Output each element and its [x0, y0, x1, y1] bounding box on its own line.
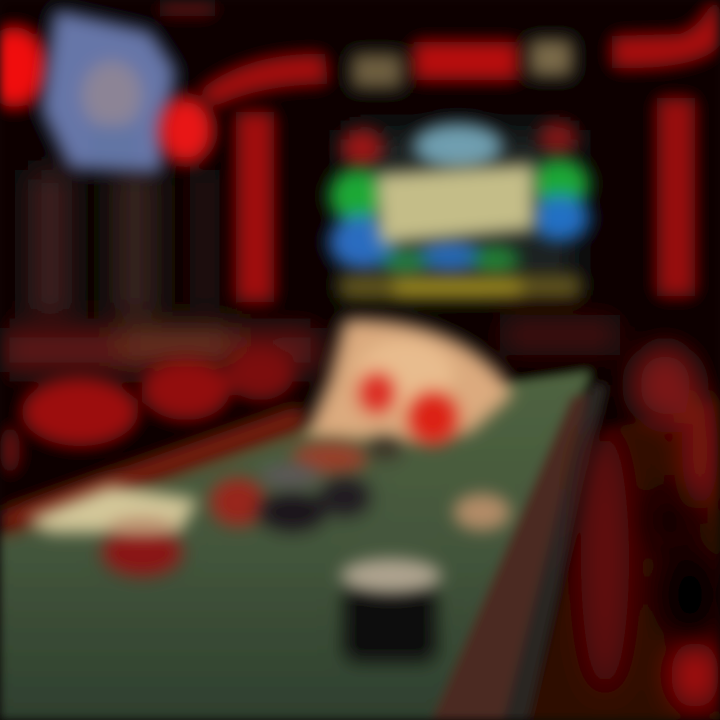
red chips — [210, 442, 368, 526]
stack top — [341, 559, 441, 593]
screen top light blue — [414, 124, 502, 168]
central screen — [330, 122, 588, 298]
blue grey poster — [42, 10, 175, 172]
central chip stacks — [210, 436, 403, 532]
red vertical pillar left — [236, 112, 274, 302]
far seat row — [0, 315, 620, 372]
front chip stack — [341, 559, 441, 661]
chip body — [102, 528, 182, 576]
dark chips — [258, 436, 403, 532]
top right red shape — [612, 0, 720, 68]
red card pips — [359, 373, 458, 444]
cream card on rail — [25, 486, 198, 532]
red seats — [0, 348, 294, 474]
felt table — [0, 372, 590, 720]
chair base — [528, 400, 720, 720]
chip top — [108, 517, 176, 535]
left chip stack — [102, 517, 182, 576]
stack body — [344, 585, 436, 661]
screen glow — [345, 130, 575, 290]
screen yellow base — [340, 276, 580, 298]
wood rail right — [432, 395, 596, 720]
screen red corners — [342, 122, 576, 166]
right red chair — [528, 345, 720, 720]
back wall pillars — [28, 170, 220, 320]
red lamp beside poster — [159, 97, 213, 163]
screen green and blue sides — [330, 160, 588, 276]
red vertical pillar right — [657, 98, 695, 296]
screen cream centre — [376, 164, 534, 244]
small card on felt — [454, 494, 510, 530]
top banner — [352, 40, 572, 88]
top left red lamp — [0, 27, 46, 107]
fanned cards — [306, 320, 512, 442]
chair dark gaps — [650, 490, 718, 637]
right grey rail edge — [503, 385, 606, 720]
chair highlights — [581, 345, 719, 709]
top red arc — [160, 0, 328, 108]
red table rail — [0, 405, 306, 536]
